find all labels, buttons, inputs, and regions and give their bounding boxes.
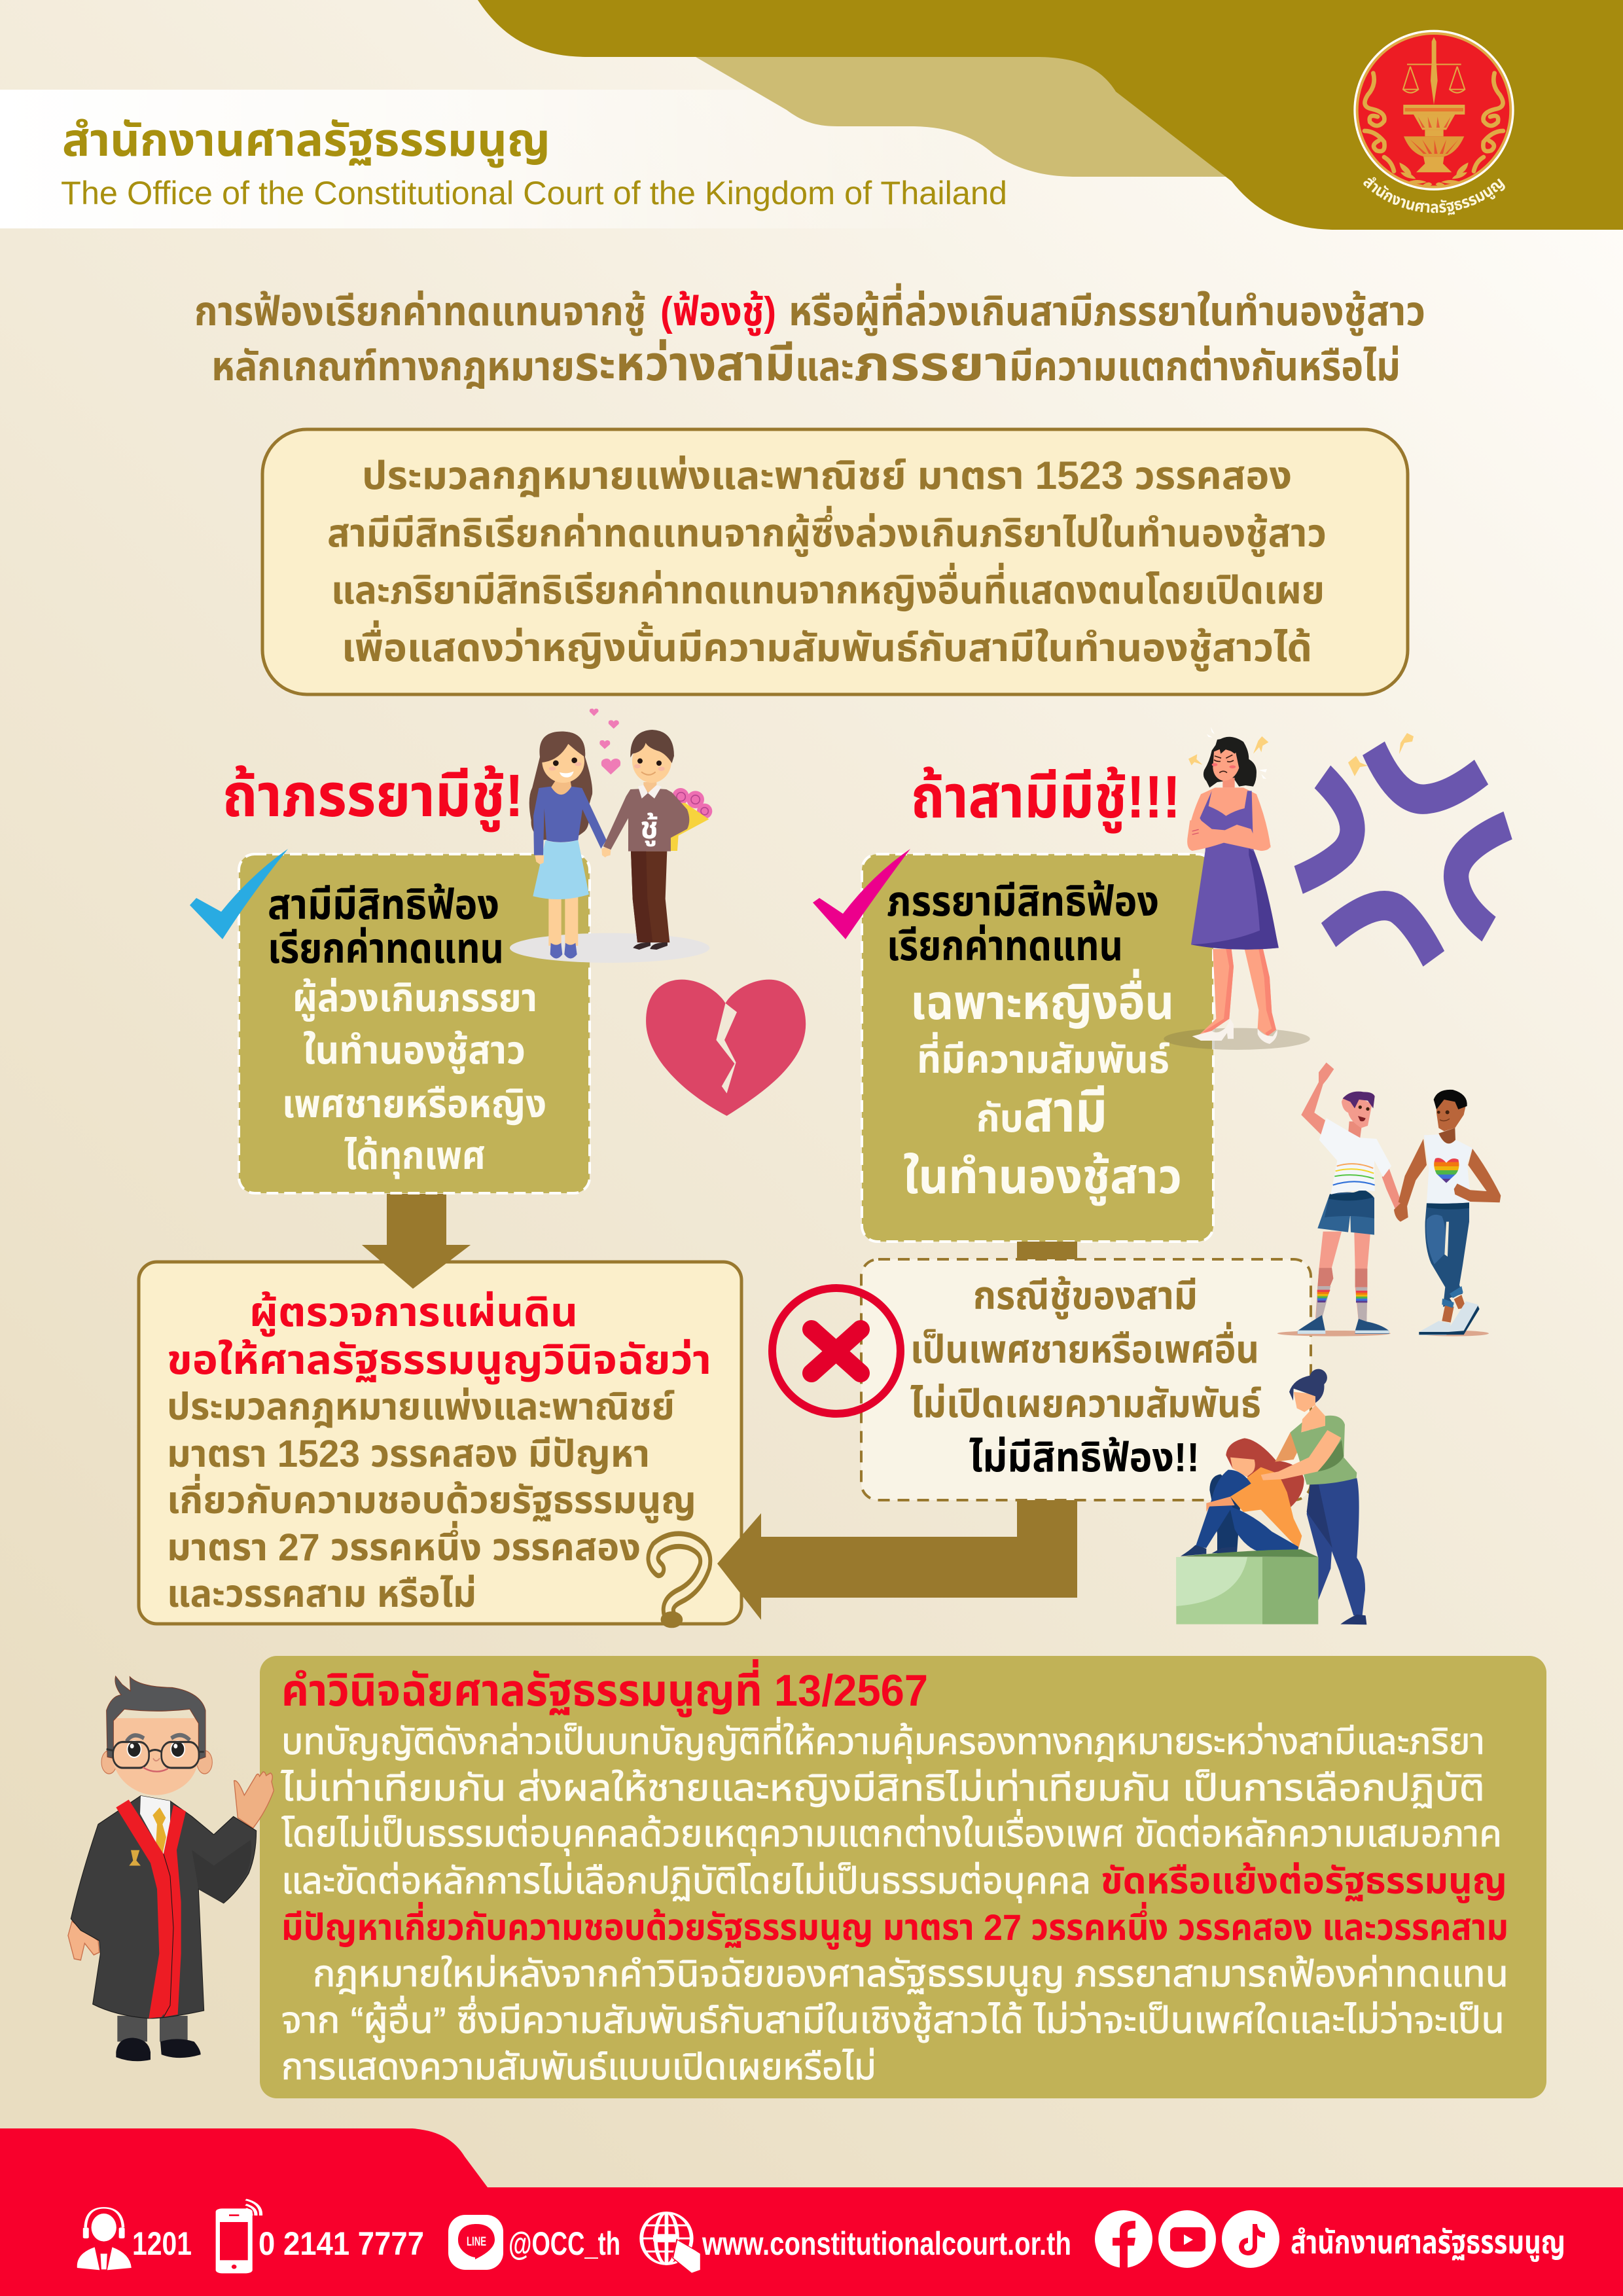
office english name: The Office of the Constitutional Court of the Kingdom of Thailand xyxy=(61,175,1007,211)
line account: @OCC_th xyxy=(508,2225,620,2262)
icon: blue check xyxy=(190,849,288,939)
heading: การฟ้องเรียกค่าทดแทนจากชู้ xyxy=(194,289,646,336)
icon: tiktok xyxy=(1222,2210,1279,2268)
ruling body text: และขัดต่อหลักการไม่เลือกปฏิบัติโดยไม่เป็นธรรมต่อบุคคล xyxy=(281,1860,1091,1903)
panel: civil code section 1523 xyxy=(262,429,1408,694)
office title: สำนักงานศาลรัฐธรรมนูญ xyxy=(62,115,550,168)
header band xyxy=(0,0,1623,230)
panel: other cases, no right to sue: เป็นเพศชายหรือเพศอื่น xyxy=(910,1321,1259,1371)
panel: ombudsman request: มาตรา 27 วรรคหนึ่ง วรรคสอง xyxy=(167,1520,641,1569)
panel: ombudsman request: มาตรา 1523 วรรคสอง มีปัญหา xyxy=(167,1433,650,1475)
panel: other cases, no right to sue: กรณีชู้ของสามี xyxy=(973,1274,1198,1319)
icon: youtube xyxy=(1158,2210,1216,2268)
heading: ภรรยา xyxy=(854,336,1009,391)
panel: wife may sue: สามี xyxy=(1024,1079,1107,1144)
panel: husband may sue: ผู้ล่วงเกินภรรยา xyxy=(293,976,537,1022)
panel: husband may sue: เพศชายหรือหญิง xyxy=(282,1082,546,1126)
icon: red cross xyxy=(772,1288,901,1414)
illustration: woman comforting xyxy=(1176,1369,1366,1624)
icon: broken heart xyxy=(646,980,806,1116)
footer band xyxy=(0,2128,1623,2296)
ruling title: คำวินิจฉัยศาลรัฐธรรมนูญที่ 13/2567 xyxy=(281,1659,928,1717)
connector stub xyxy=(1017,1242,1077,1260)
heading: if the wife has a lover: ถ้าภรรยามีชู้! xyxy=(223,762,524,833)
arrow: down xyxy=(362,1194,471,1289)
icon: globe xyxy=(641,2213,701,2273)
heading: ระหว่างสามี xyxy=(575,336,795,391)
label on shirt: ชู้ xyxy=(640,811,658,846)
heading: (ฟ้องชู้) xyxy=(660,289,776,336)
panel: civil code section 1523: เพื่อแสดงว่าหญิงนั้นมีความสัมพันธ์กับสามีในทำนองชู้สาวได้ xyxy=(342,620,1312,672)
panel: husband may sue: เรียกค่าทดแทน xyxy=(268,925,504,972)
ruling body text: ไม่เท่าเทียมกัน ส่งผลให้ชายและหญิงมีสิทธิไม่เท่าเทียมกัน เป็นการเลือกปฏิบัติ xyxy=(281,1767,1485,1808)
ruling body text: การแสดงความสัมพันธ์แบบเปิดเผยหรือไม่ xyxy=(281,2046,876,2087)
panel: ombudsman request: ขอให้ศาลรัฐธรรมนูญวินิจฉัยว่า xyxy=(167,1338,711,1385)
panel: wife may sue: เรียกค่าทดแทน xyxy=(887,922,1123,969)
panel: husband may sue xyxy=(239,854,590,1193)
panel: court ruling xyxy=(260,1656,1546,2098)
icon: mobile phone xyxy=(216,2200,261,2273)
heading: if the husband has a lover: ถ้าสามีมีชู้!!! xyxy=(911,764,1181,834)
icon: line xyxy=(448,2215,503,2270)
panel: civil code section 1523: ประมวลกฎหมายแพ่งและพาณิชย์ มาตรา 1523 วรรคสอง xyxy=(362,454,1292,497)
illustration: angry wife xyxy=(1164,727,1310,1050)
panel: husband may sue: ได้ทุกเพศ xyxy=(344,1134,486,1179)
panel: ombudsman request: ประมวลกฎหมายแพ่งและพาณิชย์ xyxy=(167,1386,675,1428)
panel: wife may sue: เฉพาะหญิงอื่น xyxy=(910,969,1174,1030)
ruling body text: ขัดหรือแย้งต่อรัฐธรรมนูญ xyxy=(1101,1860,1507,1903)
panel: wife may sue: ที่มีความสัมพันธ์ xyxy=(917,1031,1169,1081)
panel: other cases, no right to sue xyxy=(861,1259,1311,1500)
panel: ombudsman request xyxy=(139,1245,741,1624)
icon: facebook xyxy=(1095,2210,1152,2268)
icon: anger marks xyxy=(1298,748,1508,959)
panel: husband may sue: สามีมีสิทธิฟ้อง xyxy=(268,881,499,928)
icon: court emblem: สำนักงานศาลรัฐธรรมนูญ xyxy=(1363,177,1505,215)
illustration: couple xyxy=(510,709,712,963)
panel: civil code section 1523: และภริยามีสิทธิเรียกค่าทดแทนจากหญิงอื่นที่แสดงตนโดยเปิดเผย xyxy=(331,562,1325,612)
icon: pink check xyxy=(813,849,910,939)
ruling body text: มีปัญหาเกี่ยวกับความชอบด้วยรัฐธรรมนูญ มาตรา 27 วรรคหนึ่ง วรรคสอง และวรรคสาม xyxy=(281,1901,1508,1950)
panel: other cases, no right to sue: ไม่มีสิทธิฟ้อง!! xyxy=(969,1435,1200,1480)
panel: wife may sue: ในทำนองชู้สาว xyxy=(903,1149,1182,1206)
panel: other cases, no right to sue: ไม่เปิดเผยความสัมพันธ์ xyxy=(910,1382,1261,1426)
ruling body text: กฎหมายใหม่หลังจากคำวินิจฉัยของศาลรัฐธรรมนูญ ภรรยาสามารถฟ้องค่าทดแทน xyxy=(313,1953,1508,1996)
ruling body text: โดยไม่เป็นธรรมต่อบุคคลด้วยเหตุความแตกต่างในเรื่องเพศ ขัดต่อหลักความเสมอภาค xyxy=(281,1809,1502,1856)
panel: ombudsman request: เกี่ยวกับความชอบด้วยรัฐธรรมนูญ xyxy=(167,1473,696,1524)
illustration: lgbt couple xyxy=(1277,1062,1501,1336)
ruling body text: จาก “ผู้อื่น” ซึ่งมีความสัมพันธ์กับสามีในเชิงชู้สาวได้ ไม่ว่าจะเป็นเพศใดและไม่ว่าจะเป็น xyxy=(281,1996,1505,2043)
illustration: judge xyxy=(68,1676,274,2061)
panel: wife may sue: ภรรยามีสิทธิฟ้อง xyxy=(887,878,1159,925)
hotline number: 1201 xyxy=(132,2225,192,2262)
heading: หรือผู้ที่ล่วงเกินสามีภรรยาในทำนองชู้สาว xyxy=(789,283,1425,336)
panel: ombudsman request: ผู้ตรวจการแผ่นดิน xyxy=(249,1290,578,1337)
ruling body text xyxy=(281,1717,1508,2087)
panel: ombudsman request: และวรรคสาม หรือไม่ xyxy=(167,1573,476,1615)
arrow: left xyxy=(717,1499,1077,1620)
panel: civil code section 1523: สามีมีสิทธิเรียกค่าทดแทนจากผู้ซึ่งล่วงเกินภริยาไปในทำนองชู้สาว xyxy=(327,505,1327,557)
heading: มีความแตกต่างกันหรือไม่ xyxy=(1009,344,1400,389)
icon: call centre xyxy=(77,2208,132,2270)
heading: และ xyxy=(795,344,854,389)
panel: wife may sue xyxy=(862,854,1213,1242)
sparks near anger marks xyxy=(1348,733,1414,776)
phone number: 0 2141 7777 xyxy=(259,2225,424,2262)
panel: wife may sue: กับ xyxy=(976,1096,1024,1140)
icon: question mark xyxy=(653,1540,705,1628)
website: www.constitutionalcourt.or.th xyxy=(702,2225,1071,2262)
heading: หลักเกณฑ์ทางกฎหมาย xyxy=(211,344,575,389)
icon: court emblem xyxy=(1353,30,1514,215)
icon: line: LINE xyxy=(467,2235,486,2249)
ruling body text: บทบัญญัติดังกล่าวเป็นบทบัญญัติที่ให้ความคุ้มครองทางกฎหมายระหว่างสามีและภริยา xyxy=(281,1717,1485,1763)
panel: husband may sue: ในทำนองชู้สาว xyxy=(303,1028,526,1074)
heading xyxy=(194,283,1425,391)
